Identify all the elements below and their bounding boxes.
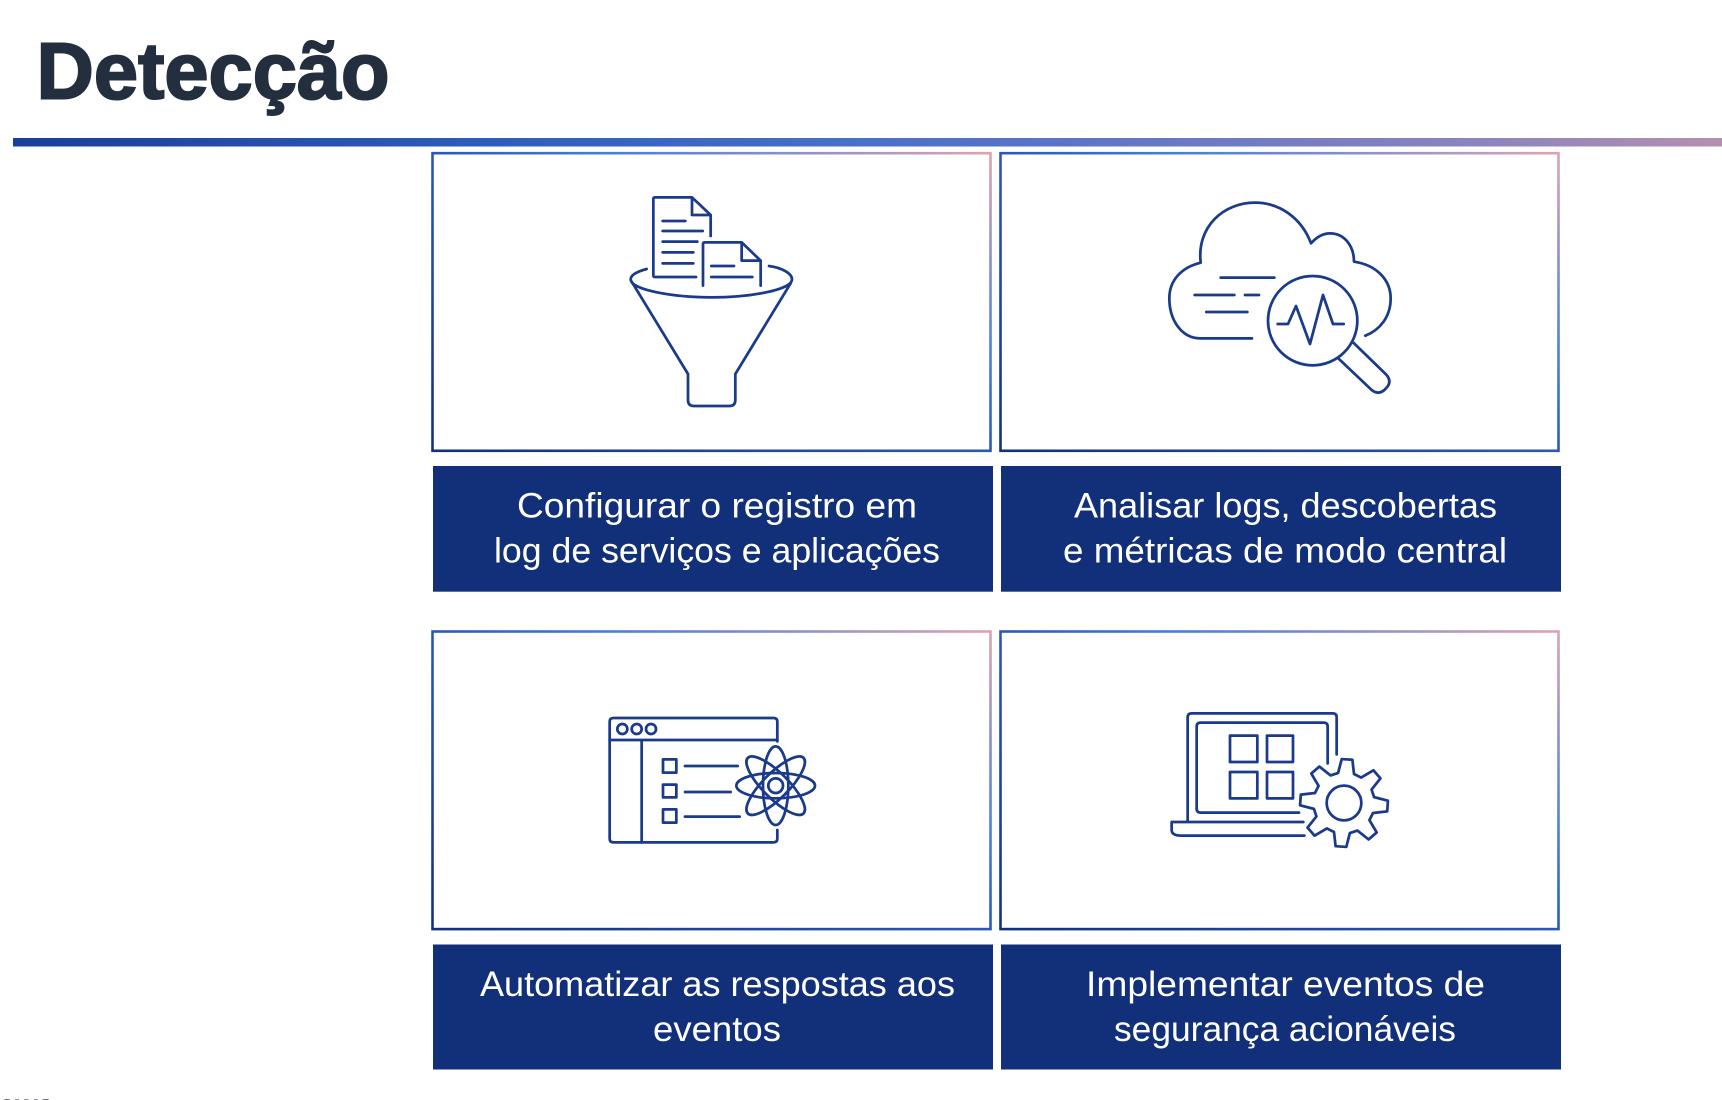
panel: eventos de seguranca bbox=[1000, 632, 1561, 1070]
label 3: Automatizar as respostas aos bbox=[480, 965, 955, 1004]
icon: window with atom bbox=[610, 718, 815, 842]
icon box 1 bbox=[432, 153, 990, 451]
panel: configurar registro bbox=[432, 153, 993, 592]
label 1: log de serviços e aplicações bbox=[494, 532, 940, 570]
label 4 bbox=[1001, 944, 1561, 1070]
icon: laptop with gear bbox=[1172, 713, 1388, 847]
label 2 bbox=[1001, 466, 1561, 592]
icon: documents into funnel bbox=[631, 197, 792, 406]
label 3: eventos bbox=[653, 1010, 781, 1049]
label 2: Analisar logs, descobertas bbox=[1074, 486, 1497, 526]
label 4: segurança acionáveis bbox=[1114, 1010, 1456, 1049]
label 3 bbox=[433, 944, 993, 1070]
panel: automatizar respostas bbox=[432, 632, 993, 1070]
label 4: Implementar eventos de bbox=[1086, 965, 1485, 1004]
icon: cloud with magnifier bbox=[1169, 203, 1391, 393]
title: Detecção bbox=[36, 26, 390, 116]
label 1 bbox=[433, 466, 993, 592]
label 2: e métricas de modo central bbox=[1063, 532, 1507, 570]
panel: analisar logs bbox=[1000, 153, 1561, 592]
icon box 2 bbox=[1000, 153, 1558, 451]
icon box 3 bbox=[432, 632, 990, 929]
icon box 4 bbox=[1000, 632, 1558, 929]
header gradient bar bbox=[13, 138, 1722, 146]
label 1: Configurar o registro em bbox=[517, 486, 917, 526]
